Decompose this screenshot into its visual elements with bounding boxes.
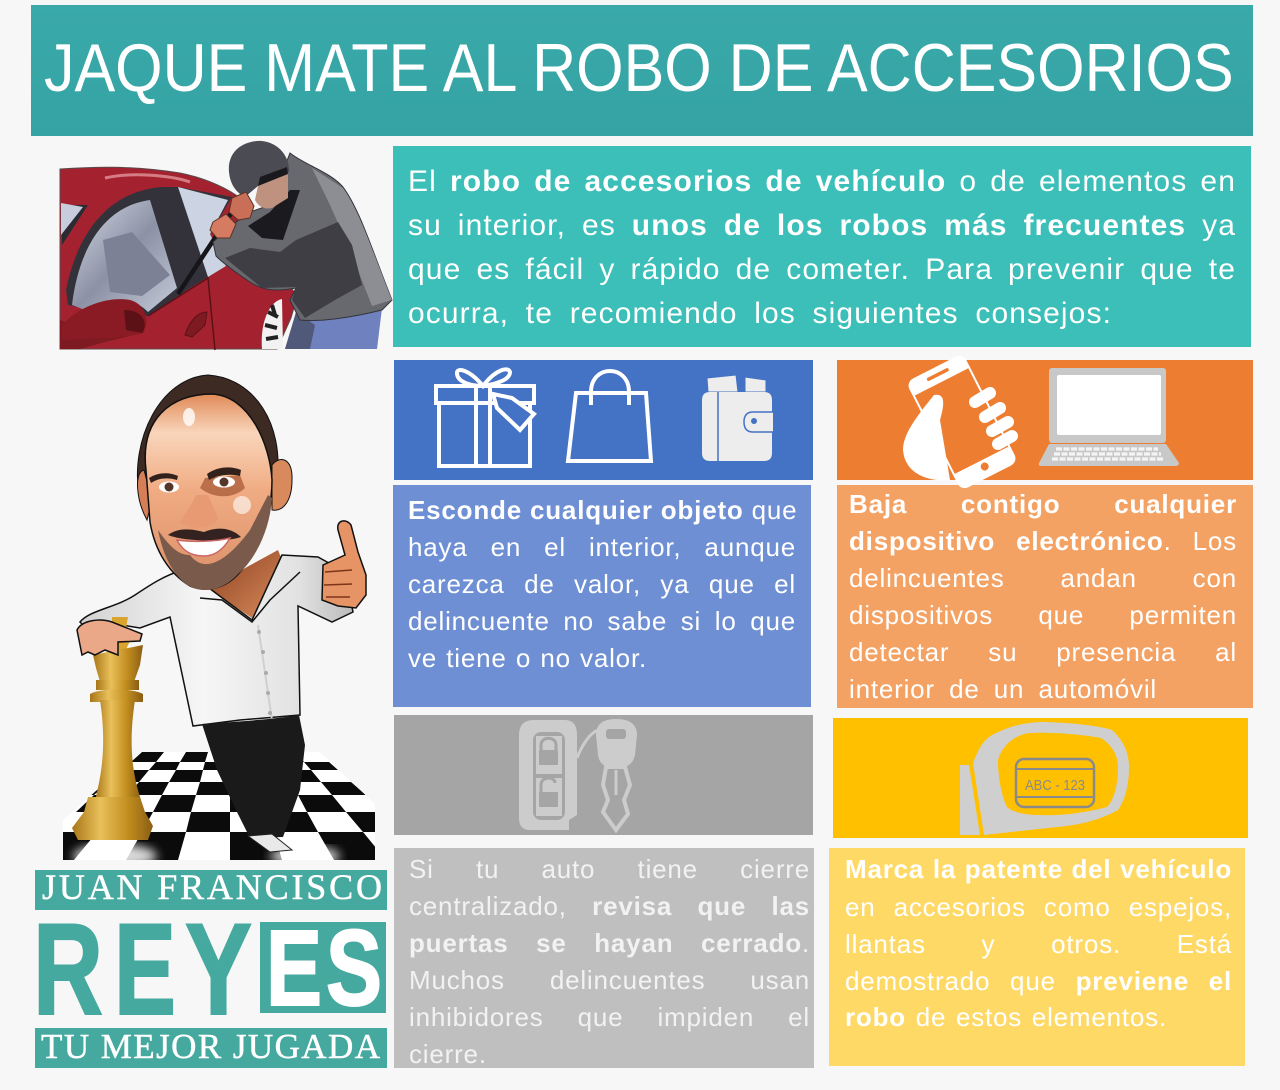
icon: car mirror with licence plate: ABC - 123	[1025, 777, 1085, 794]
icon: hand holding smartphone	[903, 353, 1018, 491]
panel: mark the plate tip	[829, 848, 1245, 1066]
surname REYES: S	[326, 907, 382, 1028]
panel: hide objects tip: haya en el interior, aunque	[408, 532, 796, 562]
panel: mark the plate tip: Marca la patente del vehículo	[845, 854, 1232, 884]
panel: intro text: El robo de accesorios de vehículo o de elementos en	[408, 165, 1236, 198]
chessboard	[63, 752, 375, 860]
wheel	[262, 299, 283, 349]
panel: blue icon header	[394, 360, 813, 480]
panel: intro text: que es fácil y rápido de cometer. Para prevenir que te	[408, 253, 1236, 286]
nose	[180, 495, 218, 528]
forehead highlight	[183, 408, 195, 426]
moustache and mouth	[168, 529, 241, 541]
thumbs-up hand	[322, 521, 366, 608]
panel: yellow icon header	[833, 718, 1248, 838]
surname REYES: E	[266, 907, 322, 1028]
panel: central locking tip: cierre.	[409, 1039, 487, 1069]
door mirror	[62, 299, 146, 340]
title banner	[31, 5, 1253, 136]
tagline banner: TU MEJOR JUGADA	[41, 1027, 381, 1066]
panel: mark the plate tip: robo de estos elementos.	[845, 1002, 1167, 1032]
panel: electronic devices tip: detectar su presencia al	[849, 637, 1237, 667]
panel: hide objects tip: Esconde cualquier objeto que	[408, 495, 797, 525]
panel: mark the plate tip: en accesorios como espejos,	[845, 892, 1232, 922]
surname REYES: Y	[185, 896, 252, 1042]
car body	[60, 167, 297, 349]
shirt	[80, 555, 353, 726]
panel: hide objects tip: carezca de valor, ya que el	[408, 569, 796, 599]
jacket	[213, 153, 392, 321]
jeans	[285, 300, 383, 349]
panel: electronic devices tip: delincuentes andan con	[849, 563, 1237, 593]
eyes and brows	[149, 473, 178, 483]
panel: intro text	[393, 146, 1251, 347]
floor reflection	[66, 842, 164, 860]
face	[145, 394, 272, 589]
panel: electronic devices tip: Baja contigo cualquier	[849, 489, 1237, 519]
trousers	[202, 715, 305, 838]
title text: JAQUE MATE AL ROBO DE ACCESORIOS	[44, 30, 1234, 106]
illustration: caricature of Juan Francisco Reyes with chess king	[63, 374, 375, 860]
panel: central locking tip: inhibidores que impiden el	[409, 1002, 810, 1032]
panel: electronic devices tip: dispositivo electrónico. Los	[849, 526, 1237, 556]
panel: hide objects tip: delincuente no sabe si lo que	[408, 606, 796, 636]
panel: central locking tip: puertas se hayan cerrado.	[409, 928, 810, 958]
panel: electronic devices tip: dispositivos que permiten	[849, 600, 1237, 630]
surname REYES: R	[33, 896, 103, 1042]
neck	[205, 550, 282, 618]
hands	[229, 192, 254, 220]
panel: orange icon header	[837, 360, 1253, 480]
panel: central locking tip: Si tu auto tiene cierre	[409, 854, 810, 884]
beard	[158, 495, 272, 590]
surname REYES	[33, 896, 386, 1042]
hood and face	[229, 141, 289, 197]
panel: central locking tip	[394, 848, 814, 1068]
panel: mark the plate tip: llantas y otros. Está	[845, 929, 1232, 959]
panel: electronic devices tip: interior de un automóvil	[849, 674, 1157, 704]
illustration: thief breaking into red car	[60, 141, 392, 350]
icon: wallet	[702, 375, 773, 461]
logo: Juan Francisco Reyes	[33, 867, 387, 1068]
name banner: JUAN FRANCISCO	[42, 867, 382, 907]
icon: shopping bag	[568, 371, 651, 461]
panel: mark the plate tip: demostrado que previene el	[845, 966, 1232, 996]
eye shadow	[200, 475, 245, 496]
door handle and lines	[185, 312, 207, 337]
panel: electronic devices tip	[837, 485, 1253, 708]
panel: hide objects tip	[393, 485, 811, 707]
hair	[137, 375, 278, 500]
panel: central locking tip: Muchos delincuentes usan	[409, 965, 810, 995]
icon: remote lock and car key	[519, 719, 637, 830]
panel: central locking tip: centralizado, revisa que las	[409, 891, 810, 921]
icon: gift box	[436, 369, 534, 466]
icon: car mirror with licence plate	[960, 722, 1129, 835]
chess king	[72, 617, 153, 840]
panel: gray icon header	[394, 715, 813, 835]
windows	[61, 205, 88, 245]
panel: intro text: su interior, es unos de los robos más frecuentes ya	[408, 209, 1236, 242]
ears	[138, 470, 152, 520]
hand on chess king	[77, 620, 142, 655]
surname REYES: E	[114, 896, 176, 1042]
panel: hide objects tip: ve tiene o no valor.	[408, 643, 647, 673]
icon: laptop	[1039, 368, 1179, 466]
crowbar	[178, 212, 232, 294]
shoe	[248, 834, 292, 852]
panel: intro text: ocurra, te recomiendo los siguientes consejos:	[408, 297, 1112, 330]
